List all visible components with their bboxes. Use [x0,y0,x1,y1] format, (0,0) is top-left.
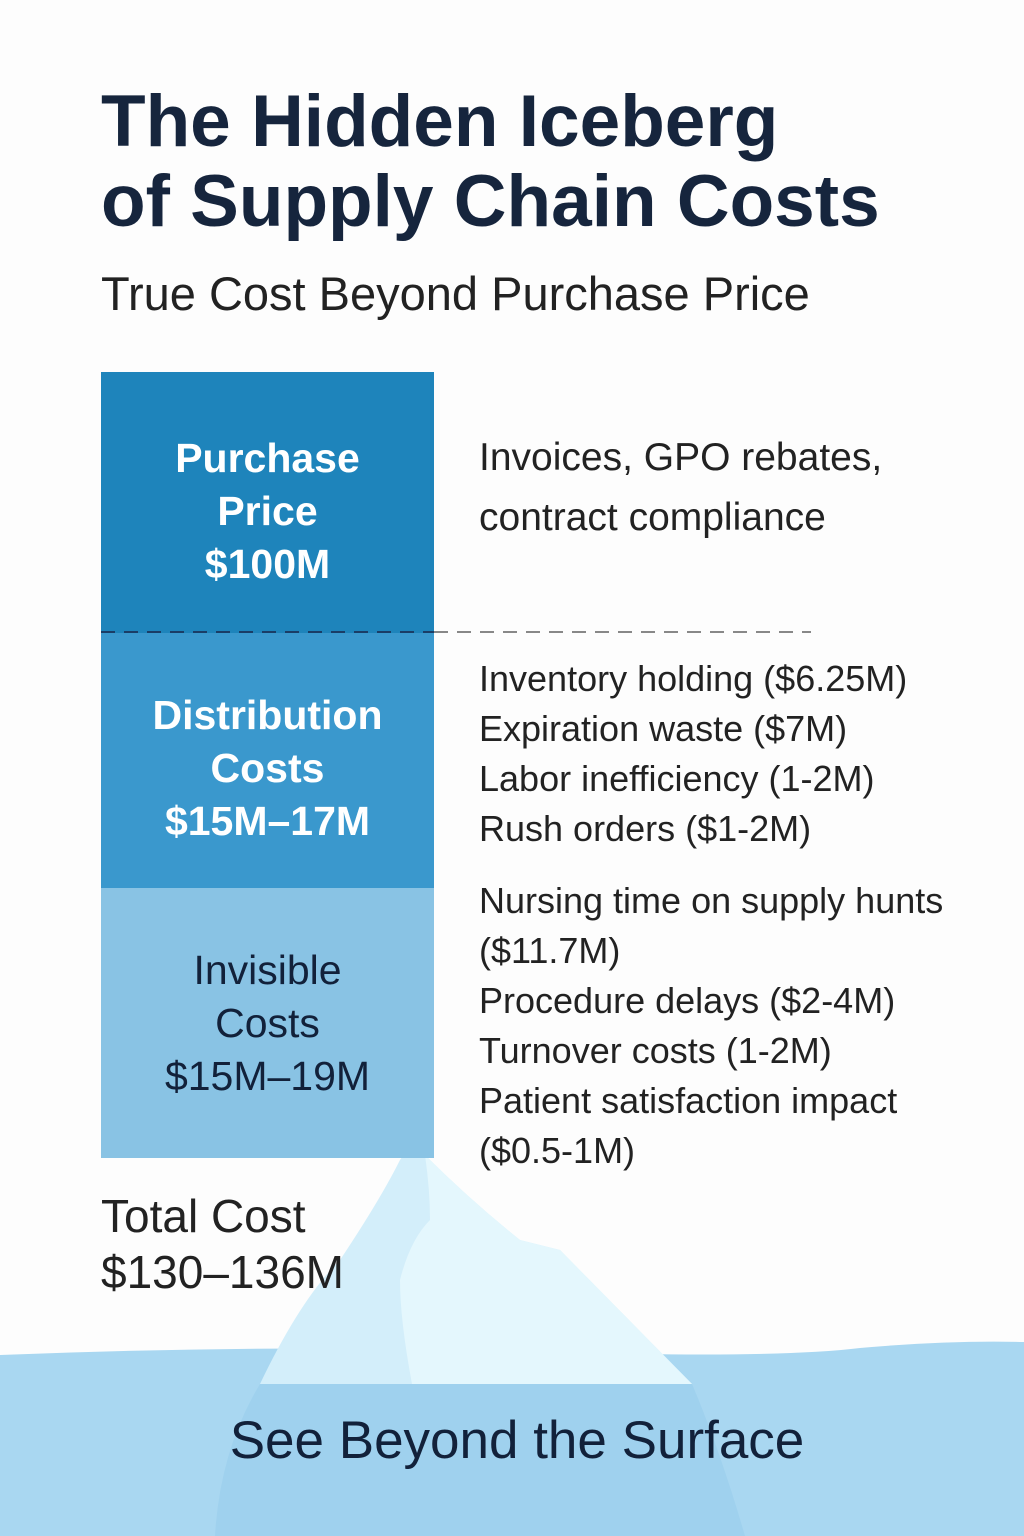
text: invisible details: Turnover costs (1-2M) [479,1030,832,1071]
text: invisible details: ($11.7M) [479,930,620,971]
total cost: $130–136M [101,1246,344,1298]
panel: purchase price: Price [217,488,318,534]
panel: distribution costs [101,633,434,888]
panel: invisible costs [101,888,434,1158]
panel: purchase price: Purchase [175,435,360,481]
dashed divider [101,631,811,633]
panel: invisible costs: Costs [215,1000,320,1046]
text: purchase details: contract compliance [479,496,826,539]
text: distribution details: Labor inefficiency (1-2M) [479,758,875,799]
text: distribution details: Inventory holding ($6.25M) [479,658,907,699]
title: of Supply Chain Costs [101,161,880,242]
text: purchase details: Invoices, GPO rebates, [479,436,882,479]
text: purchase details [479,436,882,539]
text: invisible details: ($0.5-1M) [479,1130,635,1171]
footer tagline: See Beyond the Surface [230,1411,804,1470]
panel: purchase price [101,372,434,633]
text: distribution details: Rush orders ($1-2M) [479,808,811,849]
iceberg above water [260,1151,692,1384]
total cost [101,1190,344,1298]
panel: invisible costs: $15M–19M [165,1052,370,1098]
title: The Hidden Iceberg [101,81,778,162]
text: invisible details: Patient satisfaction impact [479,1080,897,1121]
text: invisible details: Procedure delays ($2-4M) [479,980,895,1021]
iceberg underwater [215,1384,745,1536]
subtitle: True Cost Beyond Purchase Price [101,267,810,320]
text: distribution details: Expiration waste ($7M) [479,708,847,749]
panel: distribution costs: Costs [211,745,324,791]
text: invisible details [479,880,943,1171]
panel: purchase price: $100M [205,541,330,587]
panel: distribution costs: Distribution [152,692,383,738]
panel: distribution costs: $15M–17M [165,798,370,844]
total cost: Total Cost [101,1190,306,1242]
title [101,81,880,242]
water [0,1342,1024,1536]
text: invisible details: Nursing time on supply hunts [479,880,943,921]
panel: invisible costs: Invisible [193,946,342,992]
text: distribution details [479,658,907,849]
